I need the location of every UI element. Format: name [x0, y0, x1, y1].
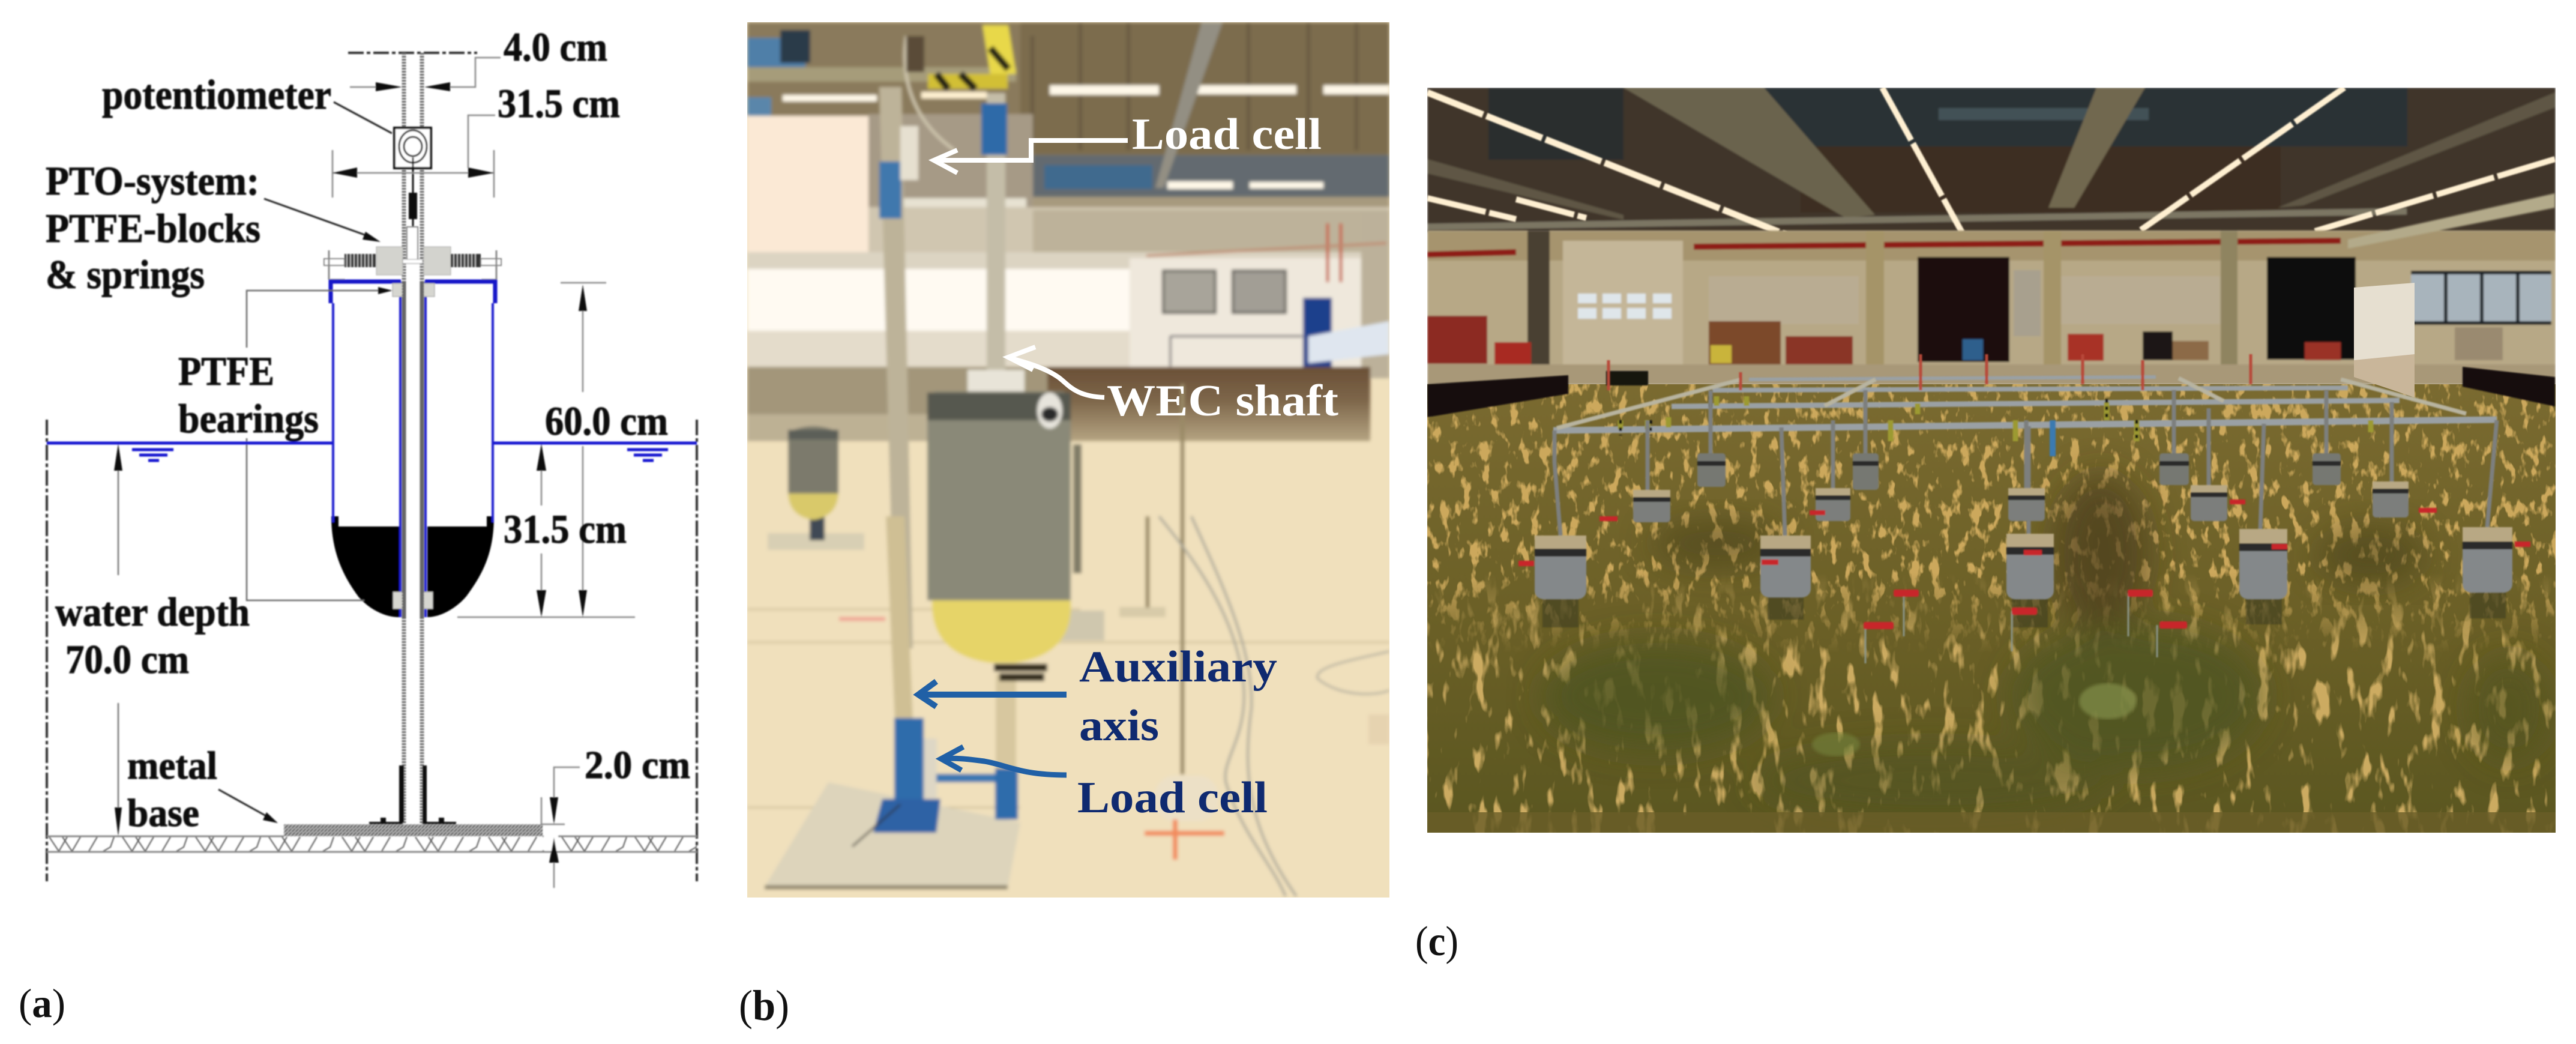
leader: PTFE bearings — [247, 287, 393, 600]
PTO blocks and springs — [324, 247, 501, 280]
water surface — [1427, 384, 2556, 833]
dimension: 31.5 cm width — [333, 115, 495, 198]
label: PTO-system: & springs — [46, 252, 205, 297]
label: Load cell bottom: Load cell — [1077, 773, 1268, 822]
PTFE bearings — [393, 283, 435, 609]
buoy hull ballast — [331, 516, 494, 617]
label: 31.5 cm draft: 31.5 cm — [504, 506, 627, 552]
caption: (c): (c) — [1415, 919, 1458, 965]
water level symbol right — [627, 450, 668, 460]
arrow: potentiometer — [334, 102, 392, 133]
support post lower — [996, 674, 1016, 788]
label: 60.0 cm: 60.0 cm — [545, 398, 668, 444]
vertical shaft — [404, 53, 422, 824]
label: metal base: metal — [127, 744, 217, 788]
photo b: hall background — [747, 22, 1389, 898]
wave gauges — [1518, 499, 2530, 663]
label: metal base — [127, 744, 217, 835]
tank boundaries — [47, 420, 697, 881]
poles — [879, 87, 913, 648]
steel frame with markers — [1553, 354, 2497, 456]
label: PTO-system — [46, 158, 260, 297]
WEC buoy — [331, 282, 495, 618]
buoy reflections — [1542, 591, 2506, 627]
equipment along wall — [1427, 316, 1487, 364]
label: PTO-system: PTO-system: — [46, 158, 259, 204]
arrow: auxiliary axis — [918, 681, 1067, 707]
second WEC — [768, 533, 864, 550]
basin edge — [1427, 364, 2556, 385]
white board — [2354, 283, 2415, 397]
label: Auxiliary axis — [1079, 642, 1277, 750]
arrow: PTO-system — [264, 199, 381, 242]
dimension: water depth — [114, 444, 122, 836]
water level symbol left — [132, 450, 173, 460]
pictures on wall — [1163, 271, 1215, 313]
water line — [47, 442, 697, 444]
background pieces on floor — [1056, 611, 1104, 641]
arrow: WEC shaft — [1008, 347, 1104, 397]
arrow: metal base — [218, 789, 278, 823]
panel c: photo of WEC array in wave basin — [1427, 88, 2556, 833]
garage door windows — [1578, 294, 1672, 319]
ceiling lights — [1427, 88, 2555, 235]
label: metal base: base — [127, 791, 199, 835]
buoy walls — [333, 282, 493, 617]
dimension: 60 cm — [457, 283, 635, 617]
label: 4.0 cm: 4.0 cm — [504, 24, 607, 70]
dark ducting — [1033, 155, 1389, 198]
rods — [1554, 390, 2497, 536]
label: Auxiliary axis: Auxiliary — [1079, 642, 1277, 692]
arrow: load cell bottom — [941, 747, 1067, 775]
panel a: WEC schematic drawing — [46, 24, 697, 888]
upper back wall — [868, 114, 1033, 216]
label: PTFE bearings — [178, 348, 319, 441]
photo c: back wall — [1427, 193, 2556, 385]
potentiometer box — [394, 128, 431, 260]
label: water depth — [55, 589, 250, 682]
label: Load cell top: Load cell — [1132, 110, 1322, 159]
label: 31.5 cm: 31.5 cm — [498, 80, 620, 126]
WEC array — [1518, 390, 2530, 663]
third row buoys — [1697, 453, 2341, 490]
dimension: 31.5 cm draft — [537, 444, 546, 617]
blue door — [1303, 298, 1332, 367]
ground — [47, 834, 697, 852]
label: PTO-system: PTFE-blocks — [46, 205, 260, 251]
black basin side blocks — [1427, 367, 2555, 417]
floor — [765, 442, 1224, 890]
label: WEC shaft: WEC shaft — [1107, 376, 1338, 426]
main WEC — [968, 370, 1025, 391]
photo c: ceiling — [1427, 88, 2556, 232]
dimension: shaft width — [350, 58, 501, 91]
yellow and black top fixture — [983, 25, 1016, 75]
label: Auxiliary axis: axis — [1079, 701, 1159, 750]
base plate — [765, 782, 1020, 888]
panel b: photo of single WEC — [747, 22, 1389, 898]
basin wall — [747, 367, 1047, 441]
label: PTFE bearings: PTFE — [178, 348, 274, 394]
arrow: load cell top — [934, 140, 1128, 173]
label: water depth: 70.0 cm — [65, 636, 189, 682]
second row buoys — [1633, 481, 2409, 522]
windows — [747, 269, 1130, 331]
label: potentiometer: potentiometer — [102, 72, 331, 118]
dimension: 2.0 cm — [541, 767, 580, 888]
shaft foot — [369, 765, 456, 825]
label: PTFE bearings: bearings — [178, 396, 319, 441]
caption: (b): (b) — [739, 982, 789, 1030]
shaft centre line — [348, 52, 477, 54]
metal base — [284, 824, 543, 836]
darker water patches — [1542, 474, 2551, 816]
green reflections — [2079, 683, 2137, 719]
label: water depth: water depth — [55, 589, 250, 635]
blue bracket — [894, 718, 924, 812]
caption: (a): (a) — [19, 980, 65, 1026]
front row buoys — [1535, 527, 2512, 599]
label: 2.0 cm: 2.0 cm — [585, 743, 690, 787]
